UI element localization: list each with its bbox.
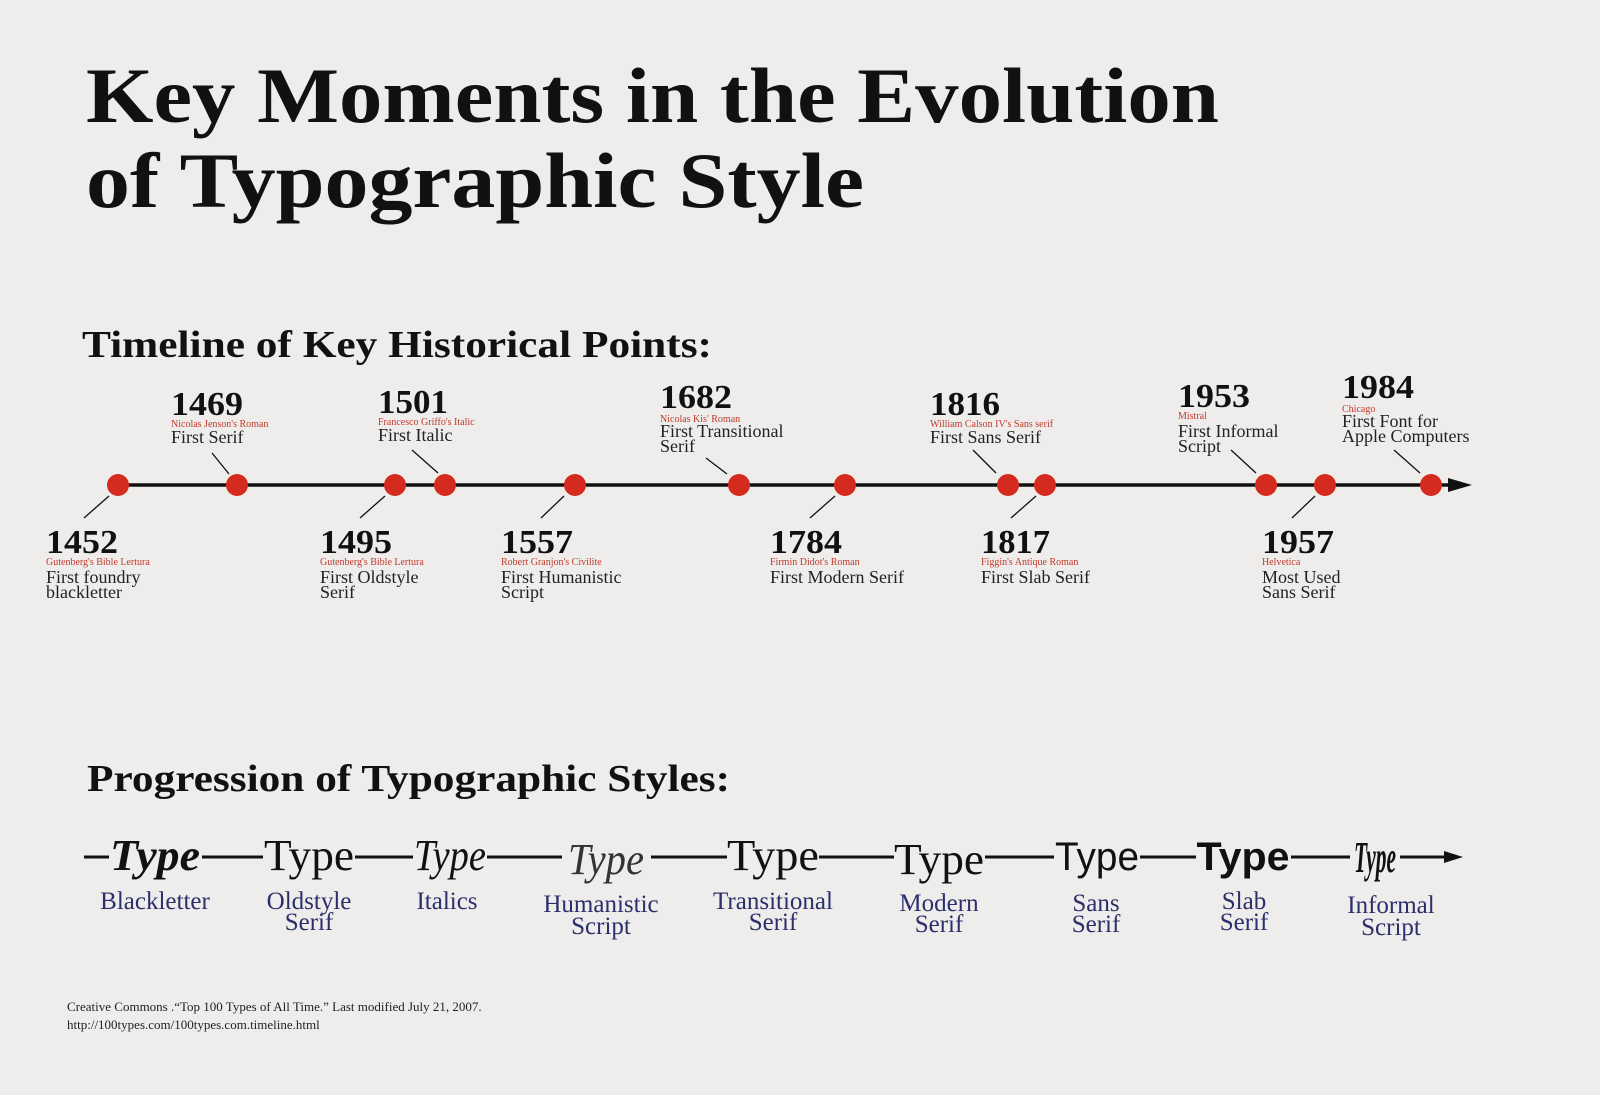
event 1984: First Font for [1342,411,1438,431]
style progression chart: Serif [1220,909,1269,936]
style progression chart: Type [727,831,819,880]
event 1784: Firmin Didot's Roman [770,557,860,568]
event 1495: 1495 [320,524,392,561]
style progression chart: Serif [749,909,798,936]
style progression chart: Serif [915,911,964,938]
heading: progression: Progression of Typographic Styles: [87,758,730,800]
event 1784: 1784 [770,524,842,561]
event 1557 [501,524,622,602]
event 1501 [378,384,475,445]
event 1953: 1953 [1178,378,1250,415]
event 1784: First Modern Serif [770,567,904,587]
event 1953 [1178,378,1278,456]
style progression chart: Type [414,831,486,880]
style progression chart: Informal [1347,892,1435,919]
style progression chart: Type [568,835,644,884]
event 1452: Gutenberg's Bible Lertura [46,557,150,568]
style progression chart: Type [894,835,984,884]
event 1957: 1957 [1262,524,1334,561]
event 1682 [660,379,784,456]
event 1495 [320,524,424,602]
style progression chart: Serif [1072,911,1121,938]
event 1682: Nicolas Kis' Roman [660,414,740,425]
event 1495: Gutenberg's Bible Lertura [320,557,424,568]
event 1816: William Calson IV's Sans serif [930,419,1054,430]
style progression chart [84,820,1463,941]
style progression chart: Script [571,913,631,940]
style progression chart: Blackletter [100,888,211,915]
event 1957: Most Used [1262,567,1341,587]
event 1817: Figgin's Antique Roman [981,557,1078,568]
event 1984: 1984 [1342,369,1414,406]
style progression chart: Script [1361,914,1421,941]
footer: citation: Creative Commons .“Top 100 Types of All Time.” Last modified July 21, 2007. [67,999,482,1014]
event 1984: Chicago [1342,404,1375,415]
event 1953: Script [1178,436,1221,456]
event 1501: 1501 [378,384,448,421]
style progression chart: Humanistic [543,891,659,918]
event 1957: Helvetica [1262,557,1301,568]
event 1984 [1342,369,1470,446]
timeline labels [46,369,1470,602]
style progression chart: Italics [416,888,478,915]
event 1817: 1817 [981,524,1050,561]
event 1495: First Oldstyle [320,567,419,587]
event 1953: First Informal [1178,421,1278,441]
heading: timeline: Timeline of Key Historical Points: [82,324,712,366]
event 1682: 1682 [660,379,732,416]
event 1817 [981,524,1090,587]
style progression chart: Type [1055,835,1139,879]
style progression chart: Type [264,831,354,880]
event 1816 [930,386,1054,447]
style progression chart: Type [110,831,200,880]
title: of Typographic Style [86,137,864,224]
event 1452: First foundry [46,567,140,587]
event 1501: Francesco Griffo's Italic [378,417,475,428]
event 1557: Script [501,582,544,602]
event 1469 [171,386,268,447]
style progression chart: Slab [1222,888,1266,915]
event 1957: Sans Serif [1262,582,1336,602]
timeline chart [84,450,1472,518]
style progression chart: Serif [285,909,334,936]
event 1953: Mistral [1178,411,1207,422]
event 1817: First Slab Serif [981,567,1090,587]
footer: citation [67,999,482,1032]
event 1682: Serif [660,436,695,456]
event 1557: First Humanistic [501,567,622,587]
style progression chart: Type [1354,833,1396,882]
style progression chart: Type [1196,835,1290,879]
title: Key Moments in the Evolution [86,52,1219,139]
style progression chart: Sans [1072,890,1120,917]
event 1469: 1469 [171,386,243,423]
style progression chart: Transitional [713,888,833,915]
event 1501: First Italic [378,425,452,445]
event 1452 [46,524,150,602]
event 1957 [1262,524,1341,602]
style progression chart: Modern [899,890,979,917]
event 1469: Nicolas Jenson's Roman [171,419,268,430]
event 1557: Robert Granjon's Civilite [501,557,602,568]
event 1495: Serif [320,582,355,602]
event 1784 [770,524,904,587]
event 1816: First Sans Serif [930,427,1041,447]
event 1816: 1816 [930,386,1000,423]
event 1682: First Transitional [660,421,784,441]
event 1452: blackletter [46,582,122,602]
event 1452: 1452 [46,524,118,561]
footer: citation: http://100types.com/100types.com.timeline.html [67,1017,320,1032]
event 1469: First Serif [171,427,244,447]
style progression chart: Oldstyle [267,888,351,915]
event 1984: Apple Computers [1342,426,1470,446]
event 1557: 1557 [501,524,573,561]
title [86,52,1219,224]
